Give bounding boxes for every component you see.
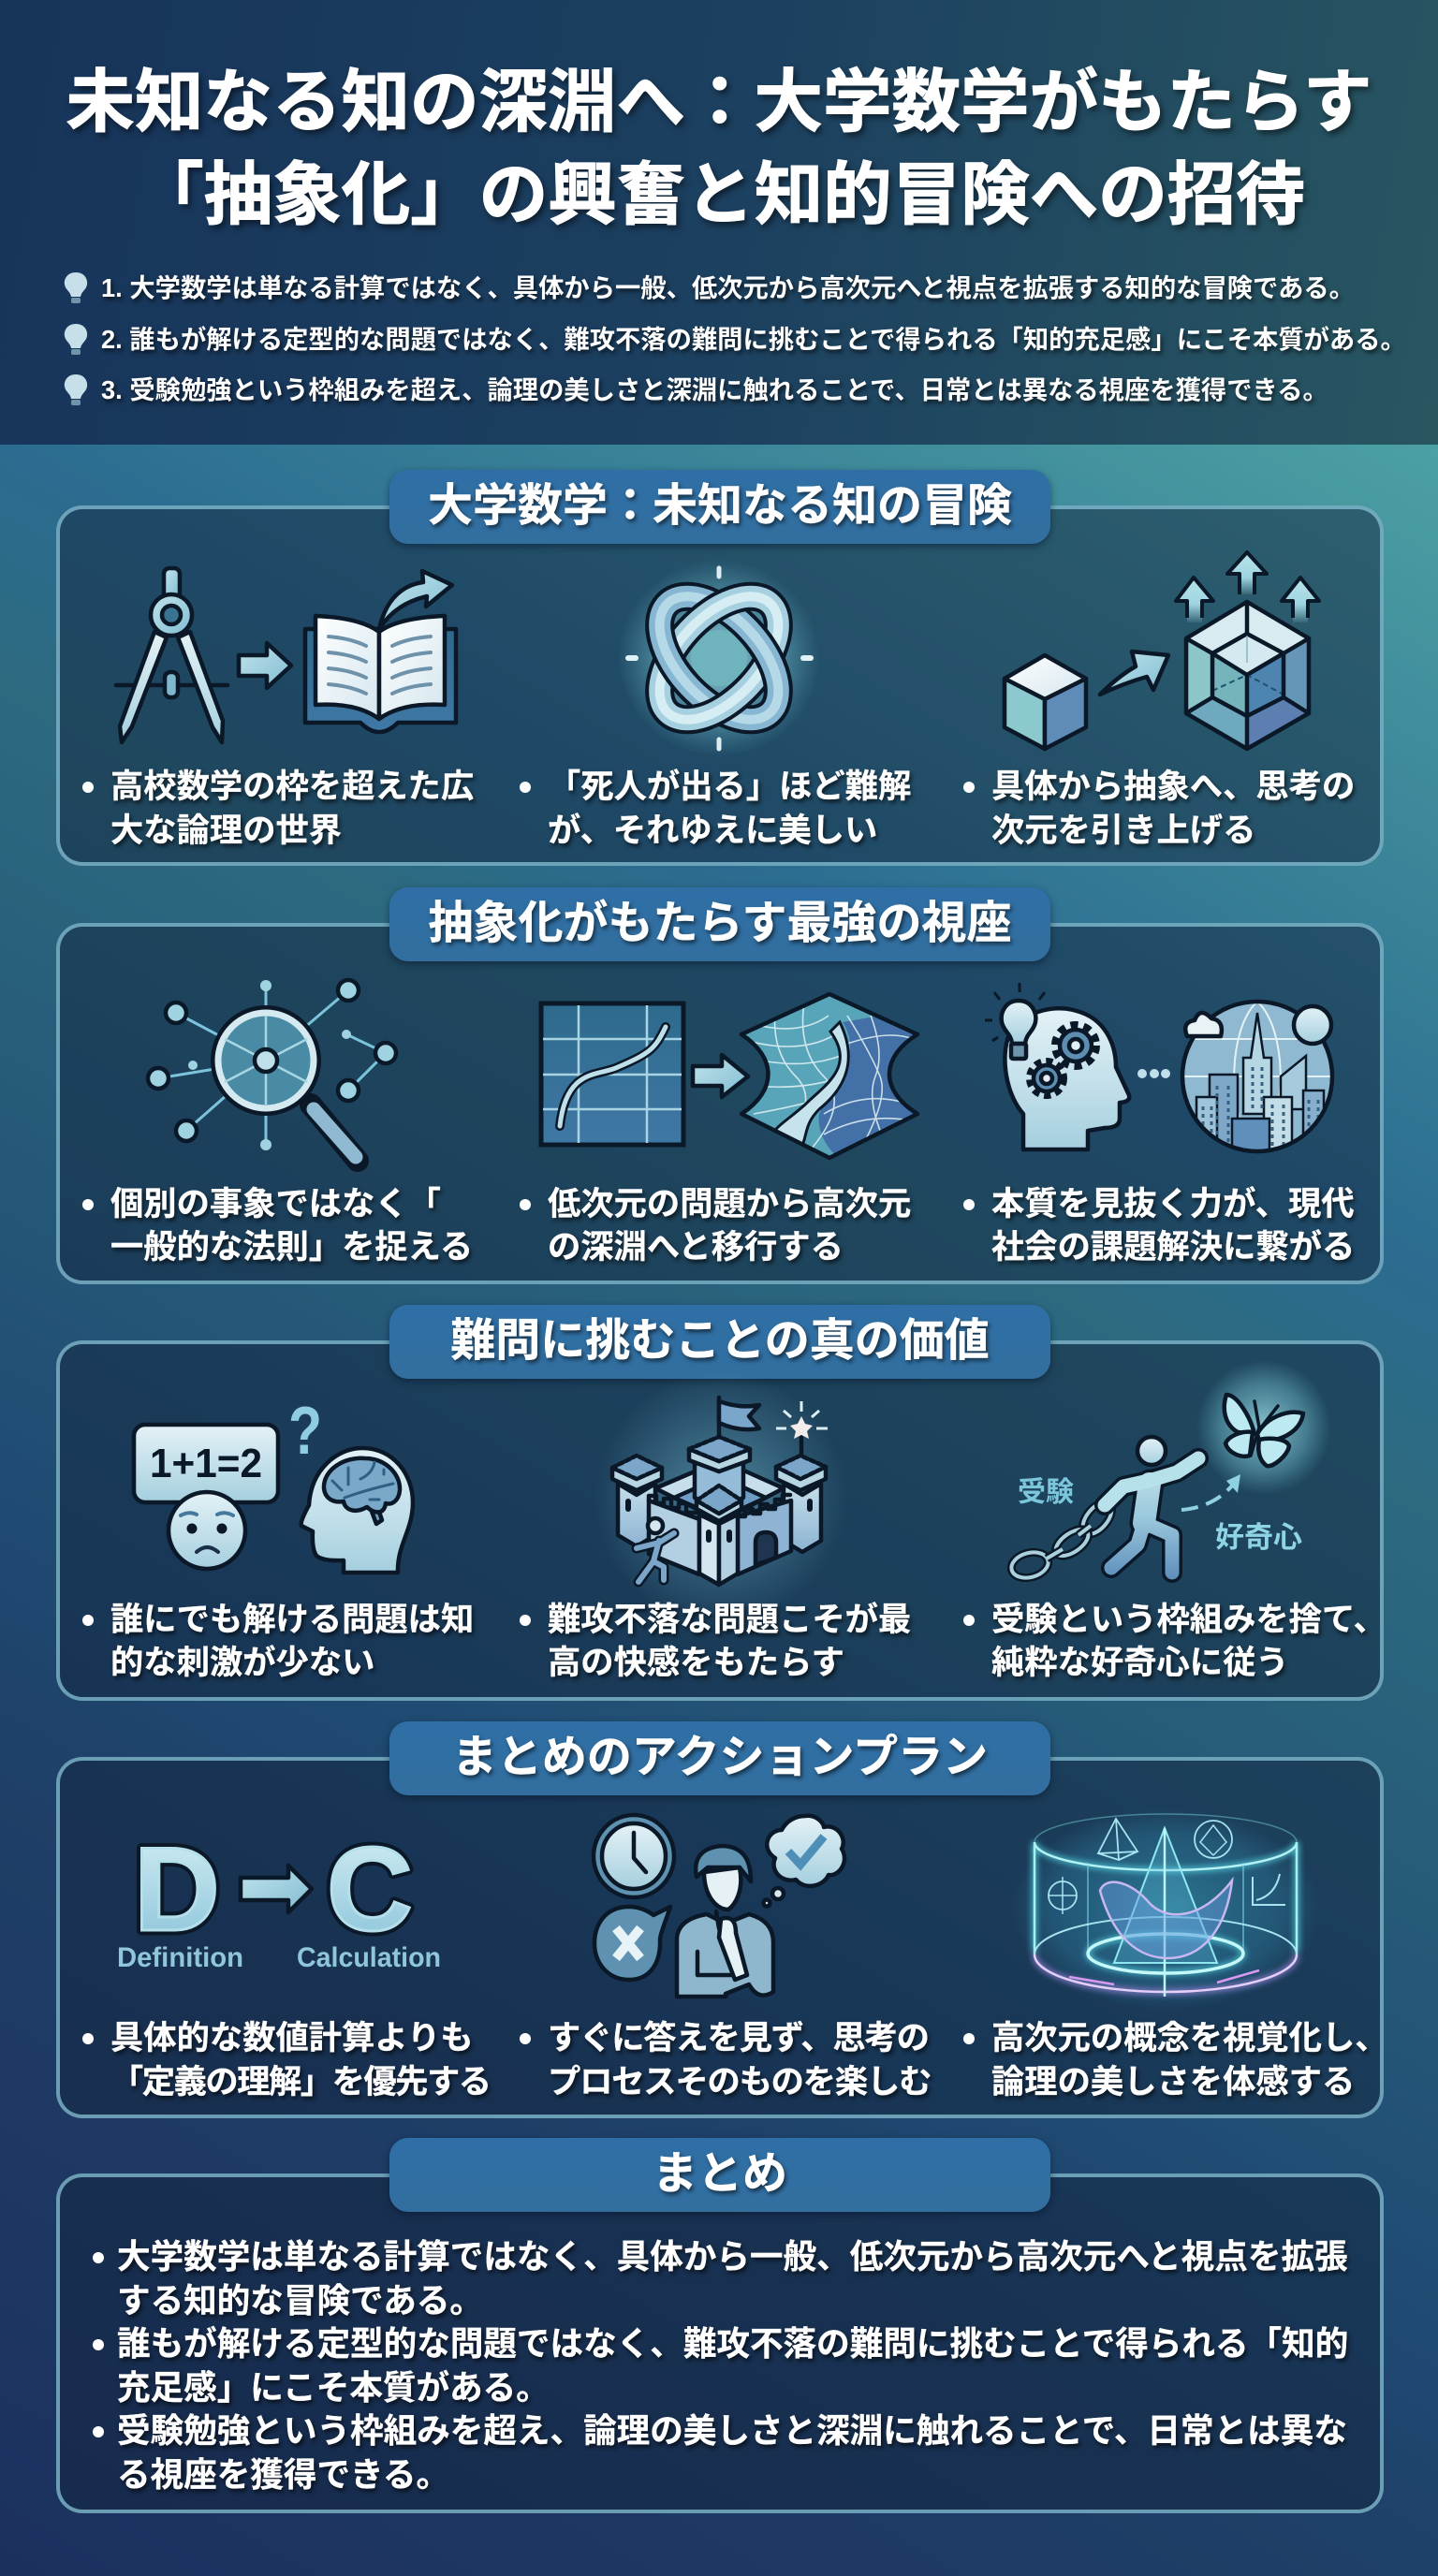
arrow: grid to warped surface — [693, 1055, 748, 1097]
bullet text 1 — [82, 1186, 473, 1266]
icon: D to C: Calculation — [297, 1942, 441, 1973]
icon: D to C — [117, 1822, 441, 1973]
heading: 抽象化がもたらす最強の視座 — [428, 899, 1012, 948]
icon: hypercube with upward arrows — [1176, 552, 1319, 749]
icon: check thought cloud — [764, 1816, 844, 1906]
summary point 1: 大学数学は単なる計算ではなく、具体から一般、低次元から高次元へと視点を拡張 — [117, 2238, 1348, 2276]
icon: warped surface — [740, 992, 922, 1161]
panel: 難問に挑むことの真の価値 — [56, 1305, 1387, 1701]
icon: D to C: C — [327, 1822, 413, 1955]
icon: question mark: ? — [288, 1394, 322, 1469]
bullet text 3: 高次元の概念を視覚化し、 — [991, 2020, 1388, 2056]
bullet text 1: 大な論理の世界 — [110, 812, 342, 849]
icon: clock — [594, 1815, 674, 1897]
bullet text 1 — [82, 1602, 476, 1681]
bullet text 2: 低次元の問題から高次元 — [548, 1186, 911, 1222]
right tower — [784, 1484, 821, 1552]
heading — [389, 470, 1050, 544]
heading — [389, 2138, 1050, 2212]
bullet text 1: 誰にでも解ける問題は知 — [110, 1602, 474, 1638]
icon: head with brain — [301, 1448, 413, 1573]
key point 1: 1. 大学数学は単なる計算ではなく、具体から一般、低次元から高次元へと視点を拡張する知的な冒険である。 — [101, 273, 1355, 302]
summary point 2: 誰もが解ける定型的な問題ではなく、難攻不落の難問に挑むことで得られる「知的 — [117, 2325, 1348, 2363]
summary point 1 — [93, 2238, 1350, 2320]
walls — [649, 1500, 699, 1574]
icon: D to C: D — [134, 1822, 220, 1955]
icon: figure with chain reaching for butterfly: 好奇心 — [1215, 1521, 1302, 1554]
panel: 大学数学：未知なる知の冒険 — [56, 468, 1384, 866]
bullet text 2: 難攻不落な問題こそが最 — [548, 1602, 911, 1638]
bullet text 2: 高の快感をもたらす — [548, 1645, 844, 1681]
heading: 難問に挑むことの真の価値 — [450, 1316, 990, 1366]
icon: open book with arrow — [305, 571, 456, 732]
bullet text 2: 「死人が出る」ほど難解 — [548, 768, 911, 805]
bullet text 2 — [520, 1186, 914, 1266]
icon: figure with chain reaching for butterfly: 受験 — [1018, 1477, 1074, 1508]
bullet text 3 — [963, 768, 1357, 850]
icon: thinking person — [677, 1846, 773, 1997]
icon: hologram cylinder — [1011, 1808, 1320, 2011]
bullet text 3: 次元を引き上げる — [991, 812, 1255, 849]
arrow: cube to hypercube — [1100, 651, 1168, 695]
panel: まとめのアクションプラン — [56, 1720, 1388, 2118]
arrow: compass to book — [239, 643, 291, 688]
title — [66, 63, 1372, 233]
bullet text 2: の深淵へと移行する — [548, 1229, 844, 1266]
climber — [637, 1533, 674, 1582]
icon: castle with flag and star — [594, 1371, 847, 1624]
heading — [389, 1305, 1050, 1379]
header band — [0, 0, 1438, 445]
heading: まとめのアクションプラン — [452, 1733, 988, 1782]
bullet text 1 — [82, 768, 477, 850]
bullet text 3 — [963, 2020, 1388, 2100]
back walls and court — [655, 1460, 784, 1521]
icon: grid with curve — [541, 1003, 683, 1145]
icon: head with gears and bulb — [985, 983, 1170, 1149]
bullet text 3: 具体から抽象へ、思考の — [991, 768, 1355, 805]
center tower — [695, 1460, 743, 1509]
bullet text 2 — [520, 1602, 913, 1681]
icon: figure with chain reaching for butterfly — [1008, 1360, 1331, 1582]
front tower — [699, 1515, 719, 1585]
icon: small cube — [1005, 655, 1086, 749]
bullet text 3: 論理の美しさを体感する — [991, 2063, 1355, 2100]
bullet text 3: 純粋な好奇心に従う — [991, 1645, 1289, 1681]
bullet text 1: 高校数学の枠を超えた広 — [110, 768, 474, 805]
bullet text 2: プロセスそのものを楽しむ — [548, 2063, 931, 2100]
bullet text 1 — [82, 2020, 492, 2101]
icon: D to C: Definition — [117, 1942, 243, 1973]
bullet text 2: すぐに答えを見ず、思考の — [548, 2020, 929, 2056]
panel: 抽象化がもたらす最強の視座 — [56, 886, 1384, 1284]
summary point 1: する知的な冒険である。 — [117, 2282, 483, 2320]
bullet text 1: 的な刺激が少ない — [110, 1645, 374, 1681]
bullet text 2 — [520, 768, 914, 850]
title: 「抽象化」の興奮と知的冒険への招待 — [135, 155, 1305, 233]
bullet text 3: 受験という枠組みを捨て、 — [991, 1602, 1387, 1638]
bullet text 3 — [963, 1602, 1387, 1681]
summary point 2 — [93, 2325, 1351, 2408]
icon: D to C: C — [327, 1822, 413, 1955]
bullet text 1: 個別の事象ではなく「 — [110, 1186, 441, 1222]
summary point 2: 充足感」にこそ本質がある。 — [117, 2369, 550, 2407]
summary point 3: 受験勉強という枠組みを超え、論理の美しさと深淵に触れることで、日常とは異な — [117, 2412, 1347, 2450]
left tower — [618, 1484, 655, 1546]
heading: 大学数学：未知なる知の冒険 — [428, 481, 1012, 531]
heading — [389, 1721, 1050, 1795]
bullet text 2: が、それゆえに美しい — [548, 812, 877, 849]
bullet text 3: 本質を見抜く力が、現代 — [991, 1186, 1355, 1222]
icon: glowing knot — [624, 565, 814, 751]
icon: cross speech bubble — [594, 1907, 670, 1980]
key point 2: 2. 誰もが解ける定型的な問題ではなく、難攻不落の難問に挑むことで得られる「知的充足感」にこそ本質がある。 — [101, 325, 1406, 354]
icon: 1+1=2 card and bored face — [134, 1425, 278, 1569]
bullet text 3: 社会の課題解決に繋がる — [991, 1229, 1355, 1266]
summary point 3 — [93, 2412, 1348, 2494]
bullet text 1: 「定義の理解」を優先する — [110, 2063, 491, 2100]
icon: magnifier with network — [148, 980, 396, 1161]
bullet text 1: 具体的な数値計算よりも — [110, 2020, 474, 2056]
bullet text 2 — [520, 2020, 933, 2100]
heading: まとめ — [653, 2149, 787, 2199]
panel: まとめ — [56, 2138, 1384, 2513]
icon: 1+1=2 card and bored face: 1+1=2 — [150, 1441, 262, 1486]
title: 未知なる知の深淵へ：大学数学がもたらす — [66, 63, 1372, 140]
bullet text 3 — [963, 1186, 1357, 1266]
key point 3: 3. 受験勉強という枠組みを超え、論理の美しさと深淵に触れることで、日常とは異なる視座を獲得できる。 — [101, 375, 1328, 404]
summary point 3: る視座を獲得できる。 — [117, 2456, 449, 2494]
icon: globe with city — [1182, 1002, 1332, 1163]
icon: D to C: D — [134, 1822, 220, 1955]
bullet text 1: 一般的な法則」を捉える — [110, 1229, 473, 1266]
heading — [389, 887, 1050, 961]
icon: compass — [116, 568, 227, 742]
